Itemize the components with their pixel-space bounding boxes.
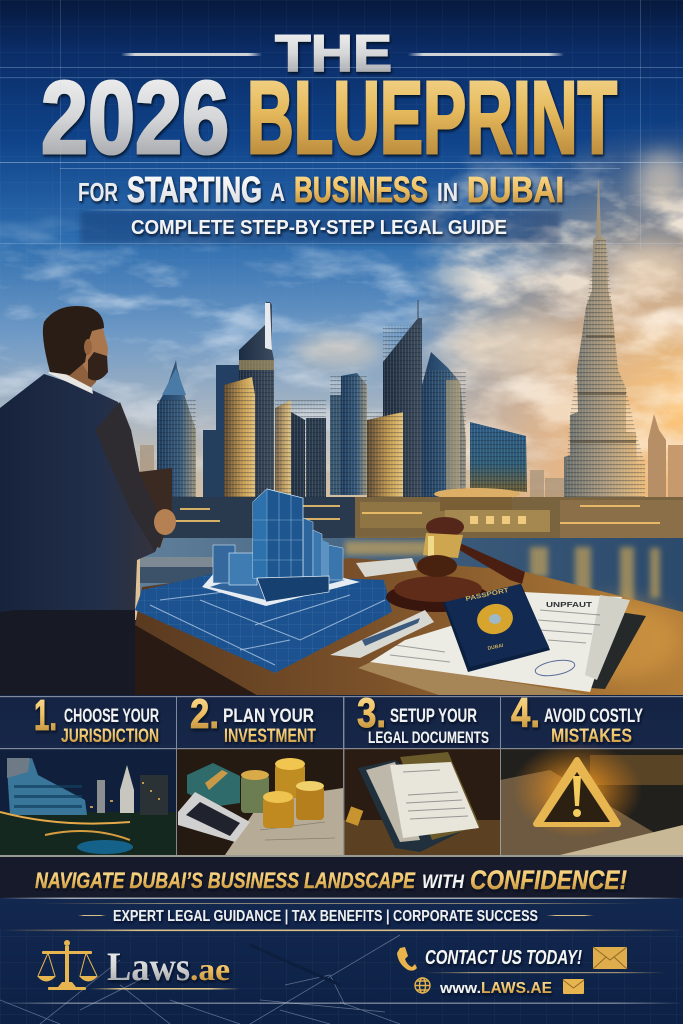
- holographic building model: [202, 489, 360, 606]
- step 4 label: MISTAKES: [551, 726, 632, 747]
- step 1 label: 1.: [34, 691, 57, 740]
- hand: [154, 509, 176, 535]
- step 2 label: PLAN YOUR: [223, 706, 314, 727]
- collar: [48, 368, 93, 394]
- dark folder: [590, 612, 646, 689]
- far right towers: [648, 414, 683, 500]
- confidence tagline: NAVIGATE DUBAI’S BUSINESS LANDSCAPE: [35, 868, 416, 893]
- river water with reflections: [140, 538, 683, 620]
- confidence tagline: [35, 865, 627, 895]
- businessman: [0, 306, 176, 697]
- subtitle: IN: [437, 177, 458, 207]
- jacket: [0, 374, 165, 612]
- steps header band: [0, 695, 683, 748]
- step 4 label: AVOID COSTLY: [544, 706, 643, 727]
- waterfront low rise and dome: [140, 488, 683, 545]
- confidence tagline: WITH: [422, 872, 465, 893]
- footer background: [0, 855, 683, 1024]
- glass block tower: [470, 422, 527, 492]
- step 2 label: [190, 690, 316, 747]
- icon: envelope: [593, 947, 627, 969]
- clouds: [0, 150, 683, 490]
- passport: PASSPORT: [465, 587, 509, 603]
- tall dark tower: [383, 300, 422, 498]
- logo text: Laws: [107, 944, 190, 989]
- gavel on sounding block: [386, 517, 525, 612]
- legal documents: UNPFAUT: [546, 602, 593, 609]
- subtitle: [78, 169, 564, 210]
- angled tower: [422, 352, 466, 498]
- calculator: [178, 792, 250, 842]
- subtitle: STARTING: [127, 169, 262, 210]
- step 3 label: [357, 689, 489, 747]
- guide strapline band: [80, 210, 570, 244]
- background: sky and blueprint grid: [0, 0, 683, 620]
- icon: scales: [37, 940, 98, 990]
- wooden table: [135, 558, 683, 697]
- blueprint sheet: [135, 574, 392, 673]
- ear: [84, 339, 92, 355]
- step 3 image: folder and documents: [343, 748, 500, 855]
- gold tower: [224, 377, 255, 505]
- logo: scales of justice and Laws.ae: [37, 940, 240, 990]
- step 4 image: warning triangle: [500, 742, 683, 855]
- subtitle: A: [270, 177, 285, 207]
- subtitle: BUSINESS: [294, 169, 428, 210]
- confidence band: [0, 855, 683, 898]
- website row: [415, 978, 584, 997]
- paper stack behind gavel: [356, 558, 417, 577]
- rule left: [121, 53, 262, 56]
- step 1 label: JURISDICTION: [61, 726, 159, 747]
- step 1 label: CHOOSE YOUR: [64, 706, 159, 727]
- website row: LAWS.AE: [481, 980, 552, 997]
- Burj Khalifa: [564, 180, 645, 502]
- cash stack: [187, 763, 240, 807]
- twin-fin tower: [216, 302, 274, 505]
- folded papers: [330, 610, 434, 658]
- folder in hand: [139, 468, 172, 548]
- step 1 label: [34, 691, 159, 747]
- website row: www.: [439, 980, 481, 997]
- confidence tagline: CONFIDENCE!: [470, 865, 627, 895]
- step 4 label: [511, 689, 643, 747]
- icon: phone: [397, 947, 417, 971]
- rule right: [408, 53, 564, 56]
- distant haze buildings: [140, 445, 565, 505]
- THE: THE: [275, 25, 392, 83]
- step 2 label: 2.: [190, 690, 219, 737]
- passport: DUBAI: [487, 643, 504, 652]
- contact row: CONTACT US TODAY!: [425, 947, 582, 969]
- step 3 label: 3.: [357, 689, 386, 736]
- icon: small envelope: [563, 979, 584, 994]
- tower left: [157, 360, 196, 500]
- step 3 label: LEGAL DOCUMENTS: [368, 728, 489, 747]
- logo: scales of justice and Laws.ae: .ae: [190, 951, 230, 987]
- subtitle: DUBAI: [467, 169, 564, 210]
- legal documents: [370, 592, 630, 692]
- face: [80, 322, 108, 376]
- blueprint guide lines: [0, 0, 683, 250]
- step 3 label: SETUP YOUR: [390, 706, 477, 727]
- 2026: 2026: [41, 60, 229, 175]
- coin stacks: [241, 770, 269, 813]
- step 2 image: calculator and gold coins: [176, 748, 343, 855]
- step 4 label: 4.: [511, 689, 540, 736]
- brown paper under documents: [358, 660, 590, 697]
- subtitle: FOR: [78, 177, 118, 207]
- beard: [88, 352, 108, 380]
- skyline of Dubai towers: [140, 180, 683, 545]
- hair: [43, 306, 104, 375]
- title block: [41, 25, 617, 175]
- step 1 image: night city: [0, 748, 176, 855]
- guide strapline band: COMPLETE STEP-BY-STEP LEGAL GUIDE: [131, 217, 507, 239]
- step 2 label: INVESTMENT: [224, 726, 316, 747]
- gold block tower: [367, 412, 403, 498]
- mid towers: [203, 400, 326, 505]
- bottom section: [0, 855, 683, 1024]
- blueprint line art: [0, 935, 400, 1024]
- neck: [52, 345, 96, 388]
- passport: [443, 584, 550, 672]
- railing: [140, 557, 218, 583]
- steps panel: [0, 689, 683, 855]
- benefits line: EXPERT LEGAL GUIDANCE | TAX BENEFITS | CORPORATE SUCCESS: [113, 908, 538, 925]
- icon: globe: [415, 978, 430, 993]
- trousers: [0, 600, 135, 697]
- twin blue tower: [330, 373, 367, 495]
- city lights: [150, 505, 660, 524]
